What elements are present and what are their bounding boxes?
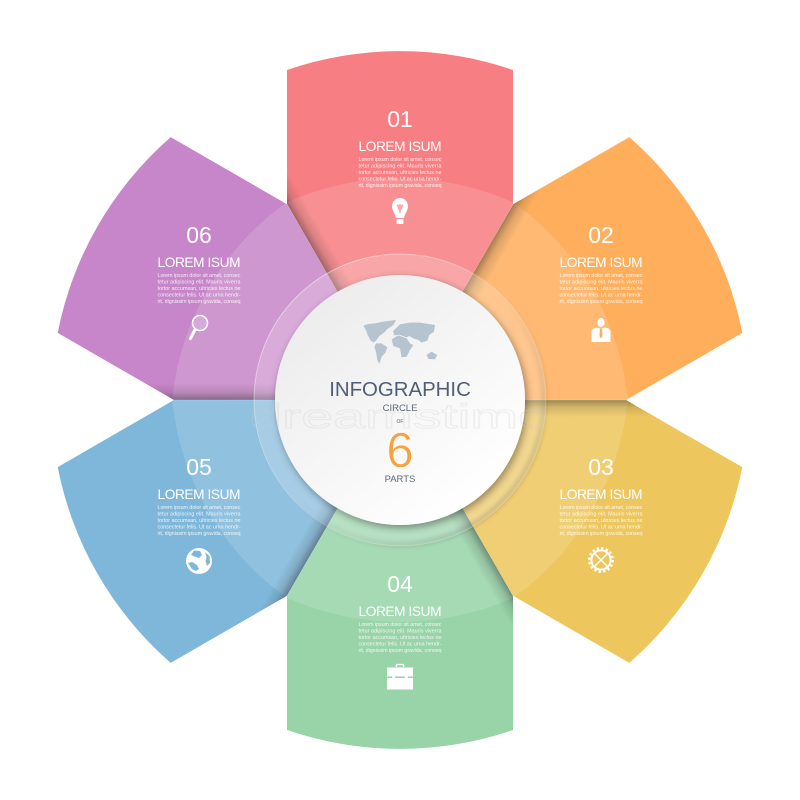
text block 04: rit, dignissim ipsum gravida, conseq [358, 648, 442, 654]
title: INFOGRAPHIC [329, 379, 471, 401]
icon: light bulb [392, 198, 408, 224]
icon: magnifying glass [190, 316, 208, 338]
text block 05: Lorem ipsum dolor sit amet, consec [158, 505, 241, 511]
center circle [275, 275, 525, 525]
subtitle: circle: CIRCLE [383, 403, 417, 414]
panel: segment 03 [343, 302, 759, 673]
text block 04 [358, 571, 442, 654]
text block 01: tetur adipiscing elit. Mauris viverra [358, 164, 442, 170]
text block 01 [358, 106, 442, 189]
watermark: dreamstime [250, 398, 550, 436]
text block 05: LOREM ISUM [158, 487, 240, 502]
text block 01: tortor accumsan, ultricies lectus ne [358, 170, 442, 176]
text block 06: tortor accumsan, ultricies lectus ne [158, 286, 240, 292]
text block 06: LOREM ISUM [158, 255, 240, 270]
text block 03: LOREM ISUM [560, 487, 642, 502]
text block 05: 05 [186, 454, 212, 480]
text block 04: Lorem ipsum dolor sit amet, consec [358, 622, 442, 628]
text block 01: LOREM ISUM [358, 139, 442, 154]
text block 01: Lorem ipsum dolor sit amet, consec [358, 157, 442, 163]
text block 05: tortor accumsan, ultricies lectus ne [158, 518, 240, 524]
text block 02: consectetur felis. Ut ac urna hendr- [560, 292, 643, 298]
ring cast shadow [256, 256, 544, 544]
subtitle: of: OF [397, 419, 403, 425]
text block 04: tetur adipiscing elit. Mauris viverra [358, 628, 442, 634]
text block 03: tetur adipiscing elit. Mauris viverra [560, 512, 642, 518]
text block 04: 04 [387, 571, 413, 597]
icon: gear [589, 548, 613, 572]
text block 01: 01 [387, 106, 413, 132]
text block 04: LOREM ISUM [358, 604, 442, 619]
panel: segment 04 [286, 400, 514, 749]
text block 03 [560, 454, 643, 537]
panel: segment 05 [41, 302, 457, 673]
text block 02: tortor accumsan, ultricies lectus ne [560, 286, 642, 292]
text block 02: LOREM ISUM [560, 255, 642, 270]
big number 6: 6 [386, 424, 414, 478]
text block 04: tortor accumsan, ultricies lectus ne [358, 635, 442, 641]
icon: briefcase [387, 664, 413, 690]
inner translucent ring [254, 254, 546, 546]
text block 02: tetur adipiscing elit. Mauris viverra [560, 280, 642, 286]
text block 05: tetur adipiscing elit. Mauris viverra [158, 512, 240, 518]
text block 06: Lorem ipsum dolor sit amet, consec [158, 273, 241, 279]
panel: segment 02 [343, 127, 759, 498]
subtitle: parts: PARTS [385, 474, 415, 485]
text block 05: rit, dignissim ipsum gravida, conseq [158, 531, 240, 537]
text block 06: 06 [186, 222, 212, 248]
text block 03: tortor accumsan, ultricies lectus ne [560, 518, 642, 524]
text block 05: consectetur felis. Ut ac urna hendr- [158, 524, 241, 530]
text block 02: rit, dignissim ipsum gravida, conseq [560, 299, 642, 305]
text block 06: rit, dignissim ipsum gravida, conseq [158, 299, 240, 305]
text block 04: consectetur felis. Ut ac urna hendr- [358, 642, 442, 648]
icon: world map [363, 320, 437, 364]
icon: businessman [592, 318, 610, 342]
text block 01: rit, dignissim ipsum gravida, conseq [358, 183, 442, 189]
text block 03: consectetur felis. Ut ac urna hendr- [560, 524, 643, 530]
text block 03: Lorem ipsum dolor sit amet, consec [560, 505, 643, 511]
text block 06: tetur adipiscing elit. Mauris viverra [158, 280, 240, 286]
text block 05 [158, 454, 241, 537]
text block 06: consectetur felis. Ut ac urna hendr- [158, 292, 241, 298]
text block 03: rit, dignissim ipsum gravida, conseq [560, 531, 642, 537]
text block 01: consectetur felis. Ut ac urna hendr- [358, 176, 442, 182]
text block 02: Lorem ipsum dolor sit amet, consec [560, 273, 643, 279]
panel: segment 06 [41, 127, 457, 498]
text block 03: 03 [588, 454, 614, 480]
text block 02 [560, 222, 643, 305]
text block 02: 02 [588, 222, 614, 248]
text block 06 [158, 222, 241, 305]
icon: globe [186, 548, 212, 574]
panel: segment 01 [286, 51, 514, 400]
